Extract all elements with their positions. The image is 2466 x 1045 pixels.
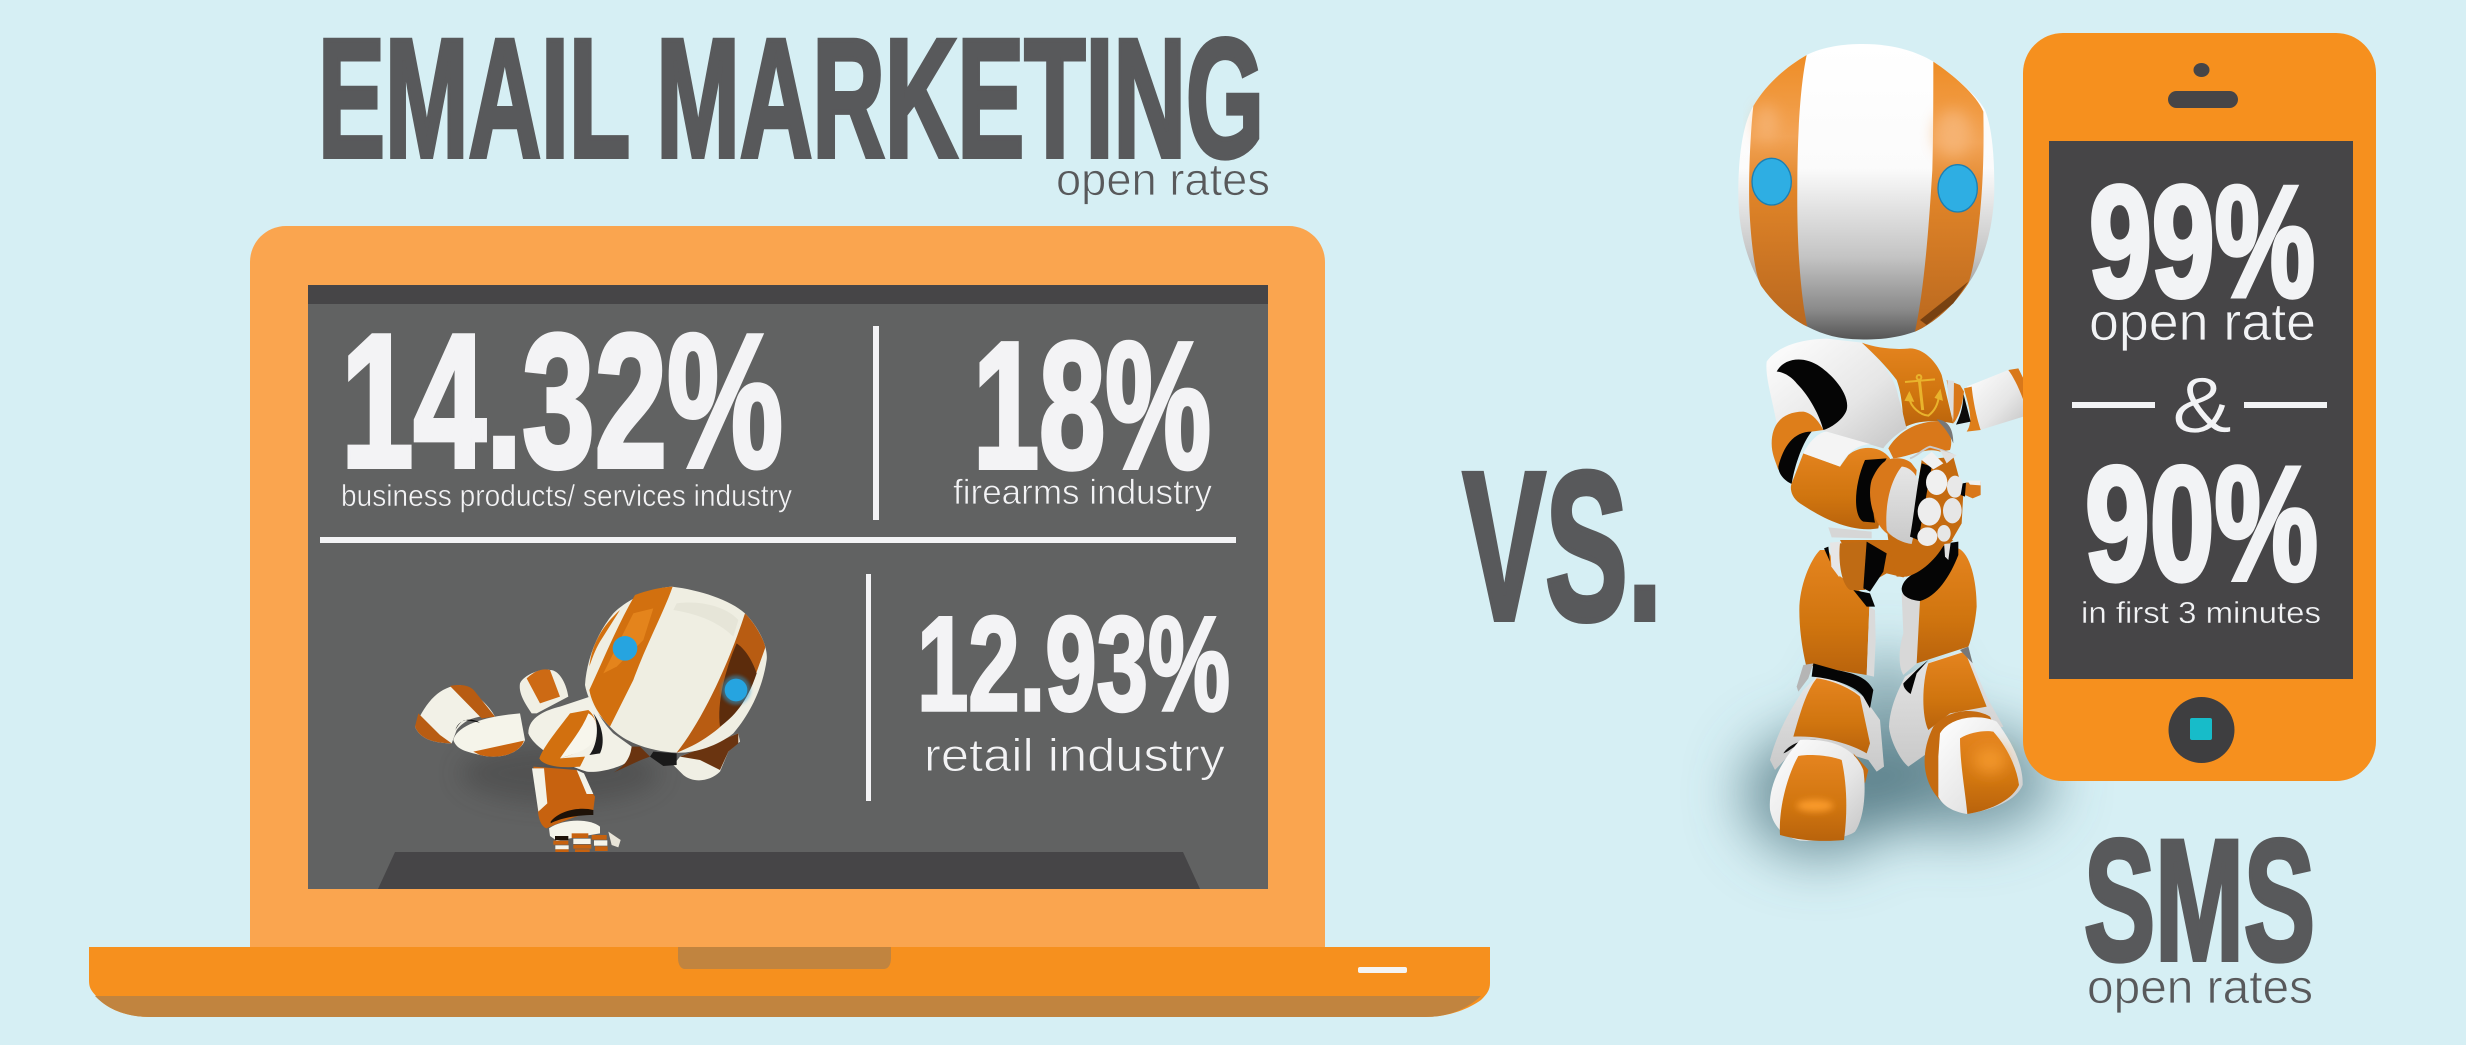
shoulder socket — [1777, 360, 1847, 430]
smartphone — [2023, 33, 2376, 781]
torso orange panel — [1862, 343, 1953, 428]
robot leg — [520, 670, 568, 713]
subtitle: open rates: open rates — [2087, 960, 2313, 1013]
stat: 90% in first 3 minutes — [2081, 434, 2321, 630]
pelvis — [1828, 527, 1872, 538]
upper left arm — [1772, 412, 1823, 470]
phone home button — [2168, 697, 2234, 763]
phone screen — [2049, 141, 2353, 679]
right calf — [1889, 647, 2003, 767]
right foot — [1925, 711, 2023, 814]
vertical divider bottom — [866, 574, 871, 801]
stat: 90% in first 3 minutes: in first 3 minutes — [2081, 595, 2321, 630]
subtitle: open rates: open rates — [1056, 154, 1270, 205]
left calf — [1770, 663, 1884, 772]
stat: 18% firearms: 18% — [973, 306, 1211, 506]
stat: 14.32% business products/services — [341, 296, 792, 513]
heading: Email Marketing open rates — [318, 4, 1270, 205]
hand — [1870, 447, 1981, 547]
big robot — [1738, 44, 2023, 841]
right thigh — [1900, 540, 1977, 675]
torso white panel — [1766, 339, 1907, 448]
stat: 14.32% business products/services: 14.32% — [341, 296, 783, 508]
robot shoulder — [539, 710, 597, 767]
phone speaker — [2168, 91, 2238, 108]
heading: SMS open rates — [2084, 804, 2315, 1013]
robot hand — [549, 821, 621, 852]
left foot — [1770, 740, 1868, 841]
robot arm — [533, 767, 595, 828]
belly — [1888, 422, 1951, 458]
stat: 18% firearms: firearms industry — [953, 473, 1213, 512]
robot body — [528, 697, 632, 772]
vertical divider top — [873, 326, 879, 520]
phone camera — [2194, 63, 2210, 77]
robot torso and arms — [1766, 339, 2023, 577]
robot foot — [415, 685, 495, 743]
robot legs and feet — [1770, 540, 2023, 841]
laptop base — [89, 947, 1490, 1017]
stat: 99% open rate — [2089, 154, 2316, 352]
stat: 12.93% retail: retail industry — [924, 729, 1225, 781]
stat: 18% firearms — [953, 306, 1213, 512]
VS. label: VS. — [1463, 428, 1662, 664]
robot eyes — [613, 636, 637, 661]
left thigh — [1799, 542, 1887, 677]
big robot shadow — [1743, 653, 2053, 857]
right arm pointing at phone — [1947, 368, 2023, 432]
robot eyes — [1752, 158, 1791, 205]
small robot doing a handstand — [415, 587, 767, 852]
robot jaw — [673, 733, 740, 780]
forearm — [1791, 448, 1890, 529]
stat: 99% open rate: open rate — [2089, 293, 2316, 352]
robot head — [585, 587, 767, 753]
ampersand with rules — [2072, 360, 2327, 449]
stat: 99% open rate: 99% — [2089, 154, 2315, 330]
title: EMAIL MARKETING: EMAIL MARKETING — [318, 4, 1264, 192]
stat: 14.32% business products/services: business products/ services industry — [341, 478, 792, 513]
ampersand with rules: & — [2172, 360, 2232, 449]
horizontal divider — [320, 537, 1236, 543]
anchor emblem — [1905, 375, 1942, 416]
title: SMS: SMS — [2084, 804, 2315, 996]
stat: 12.93% retail: 12.93% — [917, 590, 1230, 739]
stat: 90% in first 3 minutes: 90% — [2085, 434, 2318, 614]
laptop — [89, 226, 1490, 1017]
stat: 12.93% retail — [917, 590, 1230, 781]
laptop screen — [308, 285, 1268, 889]
platform under robot — [378, 852, 1200, 889]
phone body — [2023, 33, 2376, 781]
laptop lid — [250, 226, 1325, 950]
hip base — [1840, 540, 1953, 587]
robot head — [1738, 44, 1994, 339]
